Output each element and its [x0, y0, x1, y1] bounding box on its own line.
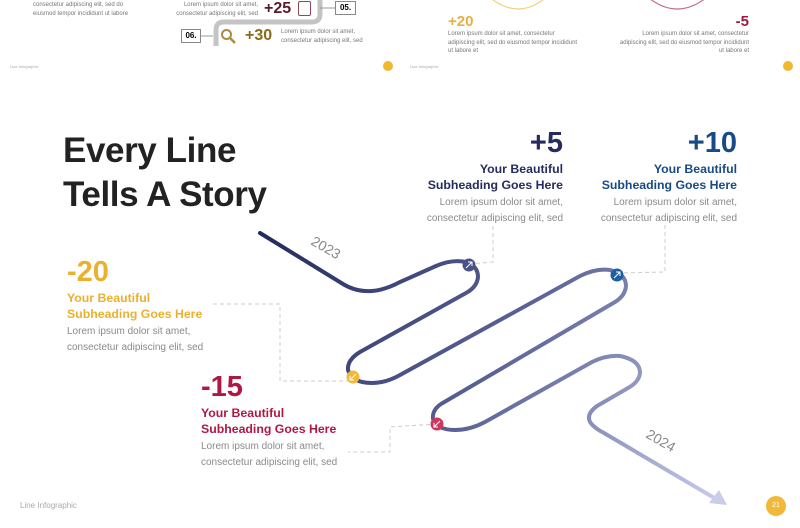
item +5: consectetur adipiscing elit, sed	[427, 213, 563, 224]
item -15: Subheading Goes Here	[201, 422, 336, 436]
item +5: Lorem ipsum dolor sit amet,	[440, 197, 563, 208]
item -15: Lorem ipsum dolor sit amet,	[201, 441, 324, 452]
item +10: Subheading Goes Here	[602, 178, 737, 192]
left thumbnail item +25: Lorem ipsum dolor sit amet,	[184, 2, 258, 8]
top strip: partial previous slides: +20	[448, 13, 473, 30]
footer label: Line Infographic	[20, 501, 77, 510]
year labels: 2023	[308, 233, 344, 262]
item -15	[201, 371, 337, 468]
top strip: partial previous slides: Lorem ipsum dolor sit amet, consectetur	[448, 31, 555, 37]
item -20: -20	[67, 256, 109, 288]
left thumbnail item +25	[176, 2, 258, 16]
top strip: partial previous slides: -5	[736, 13, 749, 30]
icon: document	[298, 1, 311, 16]
item +10	[601, 127, 737, 224]
top strip: partial previous slides: consectetur adipiscing elit, sed	[281, 38, 363, 44]
+30: +30	[245, 27, 272, 44]
item -20: Subheading Goes Here	[67, 307, 202, 321]
item -15: consectetur adipiscing elit, sed	[201, 457, 337, 468]
top strip: partial previous slides: ut labore et	[448, 48, 478, 54]
left thumbnail item +25: consectetur adipiscing elit, sed	[176, 10, 258, 16]
title	[63, 131, 267, 214]
top strip: partial previous slides: +25	[264, 0, 291, 17]
icon: magnifier	[221, 29, 236, 44]
box 06	[181, 29, 201, 43]
left thumbnail text: eiusmod tempor incididunt ut labore	[33, 10, 128, 16]
item -20	[67, 256, 203, 353]
title: Tells A Story	[63, 175, 267, 214]
left thumbnail text: consectetur adipiscing elit, sed do	[33, 2, 123, 8]
box 06: 06.	[185, 31, 197, 40]
item -20: Lorem ipsum dolor sit amet,	[67, 326, 190, 337]
top strip: partial previous slides: Line Infographic	[10, 64, 38, 69]
gray path	[201, 0, 335, 46]
item +5: Your Beautiful	[480, 162, 563, 176]
item +10: Your Beautiful	[654, 162, 737, 176]
top strip: partial previous slides: adipiscing elit, sed do eiusmod tempor incididunt	[620, 40, 749, 46]
arrow head	[709, 490, 727, 505]
top strip: partial previous slides: Line Infographic	[410, 64, 438, 69]
right thumbnail arcs	[492, 0, 704, 10]
page badge: 21	[772, 502, 780, 509]
left thumbnail text	[33, 2, 128, 16]
box 05: 05.	[340, 3, 351, 12]
box 05	[335, 1, 356, 15]
item -15: -15	[201, 371, 243, 403]
markers	[346, 258, 624, 430]
connectors	[213, 225, 665, 452]
top strip: partial previous slides: adipiscing elit, sed do eiusmod tempor incididunt	[448, 40, 577, 46]
item +10: consectetur adipiscing elit, sed	[601, 213, 737, 224]
top strip: partial previous slides	[10, 0, 793, 71]
item +10: +10	[688, 127, 737, 159]
line path	[260, 233, 727, 505]
item +5: Subheading Goes Here	[428, 178, 563, 192]
top strip: partial previous slides: Lorem ipsum dolor sit amet, consectetur	[642, 31, 749, 37]
title: Every Line	[63, 131, 236, 170]
item +10: Lorem ipsum dolor sit amet,	[614, 197, 737, 208]
item +5	[427, 127, 563, 224]
item -20: Your Beautiful	[67, 291, 150, 305]
winding line chart: 2024	[644, 426, 679, 455]
item +5: +5	[530, 127, 563, 159]
top strip: partial previous slides: ut labore et	[719, 48, 749, 54]
item -15: Your Beautiful	[201, 406, 284, 420]
page badge	[766, 496, 786, 516]
item -20: consectetur adipiscing elit, sed	[67, 342, 203, 353]
top strip: partial previous slides: Lorem ipsum dolor sit amet,	[281, 29, 355, 35]
